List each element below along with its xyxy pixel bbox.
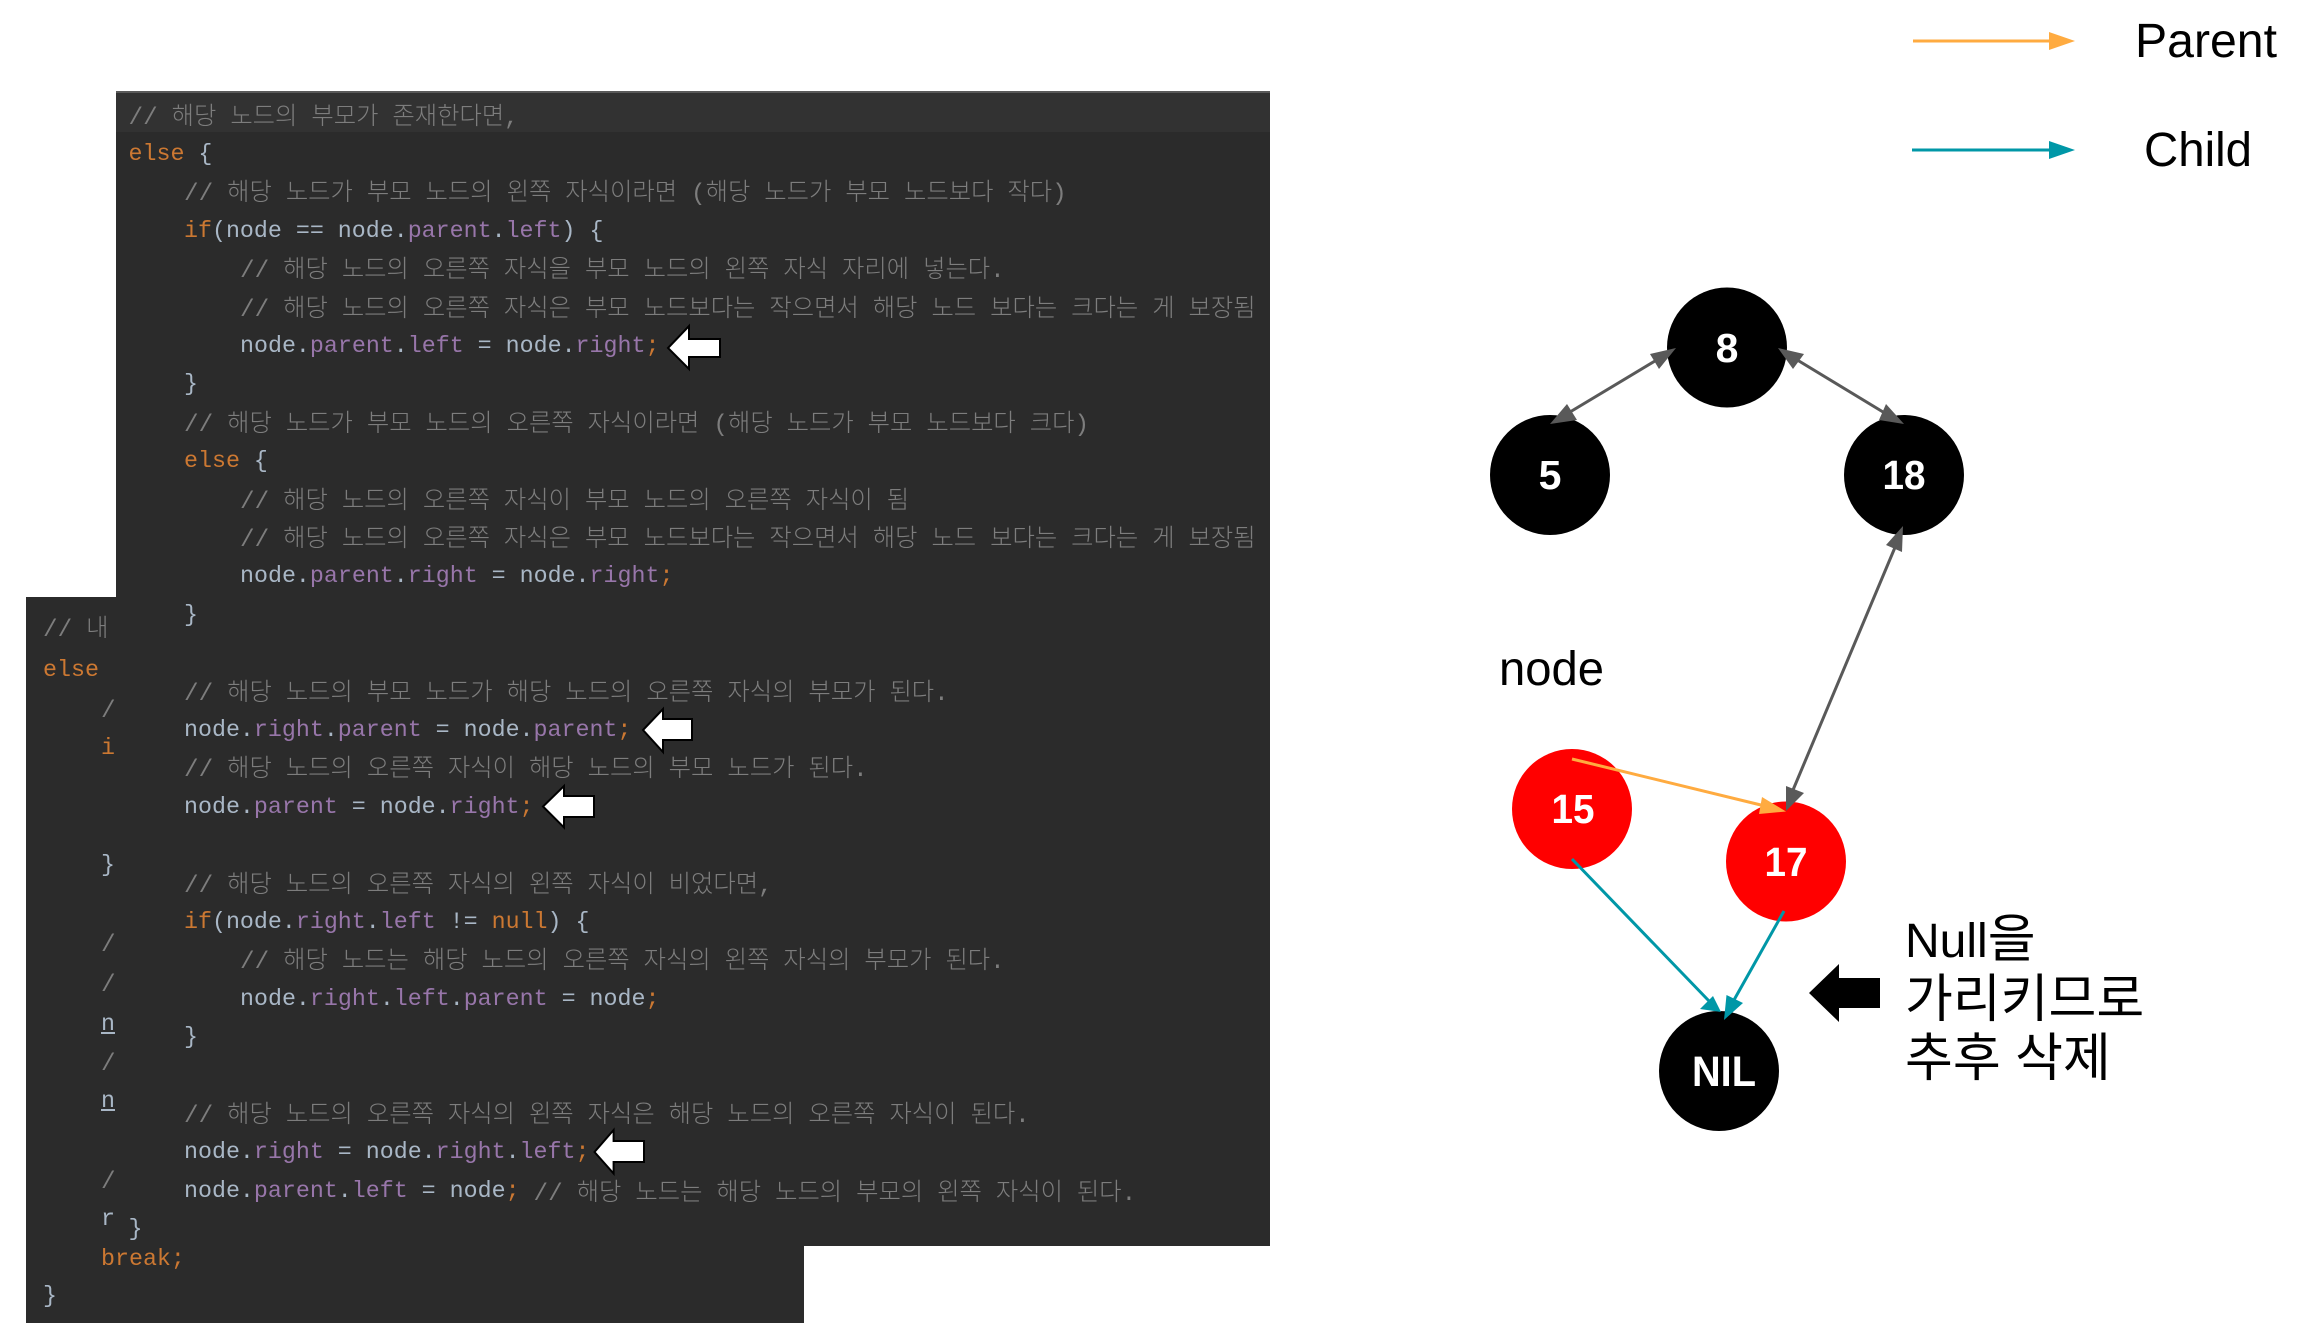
code: if left: if(node == node.parent.left) {: [184, 218, 603, 244]
code comment line: // 해당 노드의 오른쪽 자식이 해당 노드의 부모 노드가 된다.: [184, 757, 868, 784]
code comment line: // 해당 노드는 해당 노드의 오른쪽 자식의 왼쪽 자식의 부모가 된다.: [240, 949, 1005, 976]
code: break statement: break;: [101, 1246, 185, 1272]
code: if not null: if(node.right.left != null) {: [184, 909, 589, 935]
node NIL: [1659, 1011, 1779, 1131]
code comment line: // 해당 노드가 부모 노드의 오른쪽 자식이라면 (해당 노드가 부모 노드보다 크다): [184, 412, 1089, 439]
code brace: }: [128, 1216, 142, 1242]
code fragment: i: i: [101, 735, 115, 761]
code fragment: comment start: // 내: [43, 617, 108, 644]
code fragment: slash: /: [101, 1051, 116, 1078]
code fragment: n: n: [101, 1011, 115, 1037]
callout: null note: 가리키므로: [1905, 971, 2144, 1029]
code comment line: // 해당 노드의 부모가 존재한다면,: [128, 104, 519, 132]
node 8: 8: [1716, 325, 1738, 371]
panel: upper code editor: [116, 91, 1270, 1246]
code: final closing brace: }: [43, 1283, 57, 1309]
node NIL: NIL: [1692, 1048, 1756, 1096]
code fragment: r: r: [101, 1206, 115, 1232]
code fragment: slash: /: [101, 932, 116, 959]
code assignment: node.right.parent = node.parent;: [184, 717, 631, 743]
code comment line: // 해당 노드의 오른쪽 자식은 부모 노드보다는 작으면서 해당 노드 보다는 크다는 게 보장됨: [240, 296, 1256, 324]
arrow: 17 child to NIL: [1724, 911, 1784, 1020]
arrow: 15 child to NIL: [1572, 859, 1721, 1012]
code assignment: node.right.left.parent = node;: [240, 986, 659, 1012]
arrow: 18 and 17 bidirectional: [1786, 526, 1903, 811]
callout: null note: [1905, 911, 2144, 1088]
node 17: 17: [1764, 839, 1808, 885]
legend: child arrow: [1912, 141, 2075, 159]
panel: lower code editor behind: [26, 597, 804, 1323]
code: else: else {: [128, 141, 212, 167]
node 18: 18: [1882, 452, 1926, 498]
code brace: }: [184, 1024, 198, 1050]
node 15: [1512, 749, 1632, 869]
code fragment: n: n: [101, 1088, 115, 1114]
callout: null note: Null을: [1905, 911, 2036, 969]
code: else branch: else {: [184, 448, 268, 474]
legend: child label: Child: [2144, 124, 2252, 177]
code assignment: node.parent = node.right;: [184, 794, 534, 820]
node 18: [1844, 415, 1964, 535]
icon: white arrow 1: [668, 326, 720, 369]
code fragment: slash: /: [101, 1169, 116, 1196]
code brace: }: [184, 371, 198, 397]
callout: null note: 추후 삭제: [1905, 1030, 2111, 1088]
arrow: 8 and 5 bidirectional: [1550, 348, 1676, 424]
legend: parent arrow: [1913, 32, 2075, 50]
icon: white arrow 2: [643, 709, 692, 752]
code comment line: // 해당 노드가 부모 노드의 왼쪽 자식이라면 (해당 노드가 부모 노드보다 작다): [184, 181, 1067, 208]
code fragment: slash: /: [101, 698, 116, 725]
code assignment: node.parent.left = node.right;: [240, 333, 659, 359]
arrow: 8 and 18 bidirectional: [1778, 348, 1904, 424]
label: node: node: [1499, 643, 1604, 696]
node 8: [1667, 288, 1787, 408]
code comment line: // 해당 노드의 오른쪽 자식의 왼쪽 자식이 비었다면,: [184, 872, 773, 900]
node 15: 15: [1552, 786, 1594, 832]
code comment line: // 해당 노드의 오른쪽 자식의 왼쪽 자식은 해당 노드의 오른쪽 자식이 된다.: [184, 1103, 1030, 1130]
code brace: }: [184, 602, 198, 628]
code comment line: // 해당 노드의 오른쪽 자식이 부모 노드의 오른쪽 자식이 됨: [240, 488, 909, 516]
code comment line: // 해당 노드의 오른쪽 자식을 부모 노드의 왼쪽 자식 자리에 넣는다.: [240, 258, 1005, 285]
icon: white arrow 4: [594, 1130, 644, 1174]
code assignment with comment: node.parent.left = node; // 해당 노드는 해당 노드의 부모의 왼쪽 자식이 된다.: [184, 1178, 1136, 1208]
code assignment: node.parent.right = node.right;: [240, 563, 673, 589]
code comment line: // 해당 노드의 오른쪽 자식은 부모 노드보다는 작으면서 해당 노드 보다는 크다는 게 보장됨: [240, 527, 1256, 554]
node 17: [1726, 802, 1846, 922]
node 5: 5: [1539, 452, 1561, 498]
code fragment: closing brace: }: [101, 852, 115, 878]
code assignment: node.right = node.right.left;: [184, 1139, 589, 1165]
code fragment: slash: /: [101, 972, 116, 999]
legend: parent label: Parent: [2135, 15, 2277, 68]
code fragment: else keyword: else: [43, 657, 99, 683]
code comment line: // 해당 노드의 부모 노드가 해당 노드의 오른쪽 자식의 부모가 된다.: [184, 680, 949, 708]
arrow: 15 parent to 17: [1572, 759, 1786, 814]
node 5: [1490, 415, 1610, 535]
icon: black arrow pointing to NIL: [1809, 964, 1880, 1022]
icon: white arrow 3: [543, 786, 594, 828]
